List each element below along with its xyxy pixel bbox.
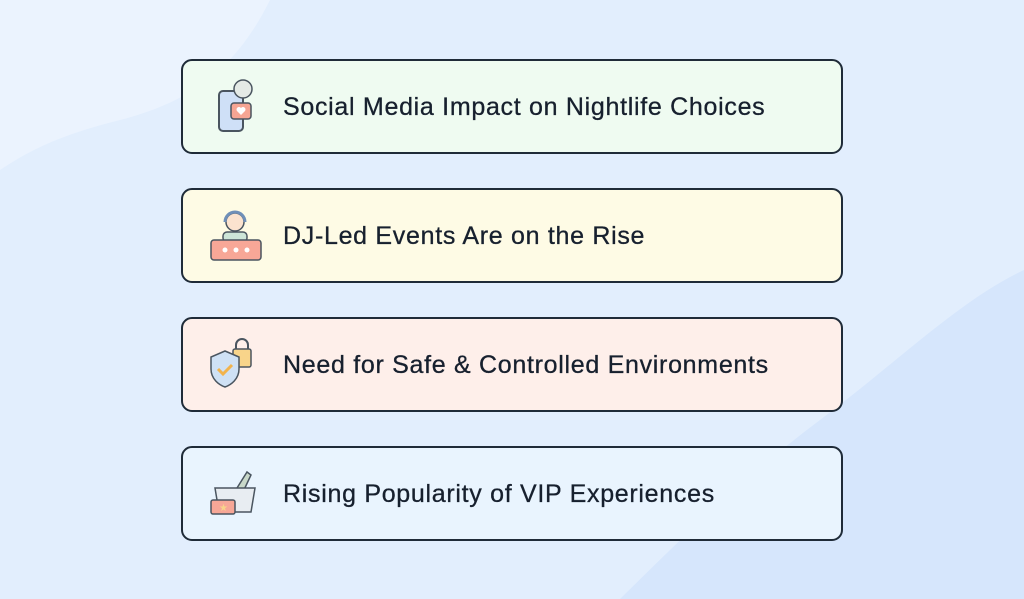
panel: DJ events <box>181 188 843 283</box>
icon: phone with heart <box>218 79 253 132</box>
panel: social media <box>181 59 843 154</box>
icon: champagne bucket and ticket <box>210 470 256 515</box>
heading text: Rising Popularity of VIP Experiences <box>283 480 715 508</box>
heading text: DJ-Led Events Are on the Rise <box>283 222 645 250</box>
icon: champagne bucket and ticket: ★ <box>219 503 228 514</box>
panel: VIP experiences <box>181 446 843 541</box>
icon: DJ <box>210 210 262 261</box>
heading text: Social Media Impact on Nightlife Choices <box>283 93 765 121</box>
icon: shield and lock <box>210 338 252 388</box>
heading text: Need for Safe & Controlled Environments <box>283 351 769 379</box>
panel: safe environments <box>181 317 843 412</box>
